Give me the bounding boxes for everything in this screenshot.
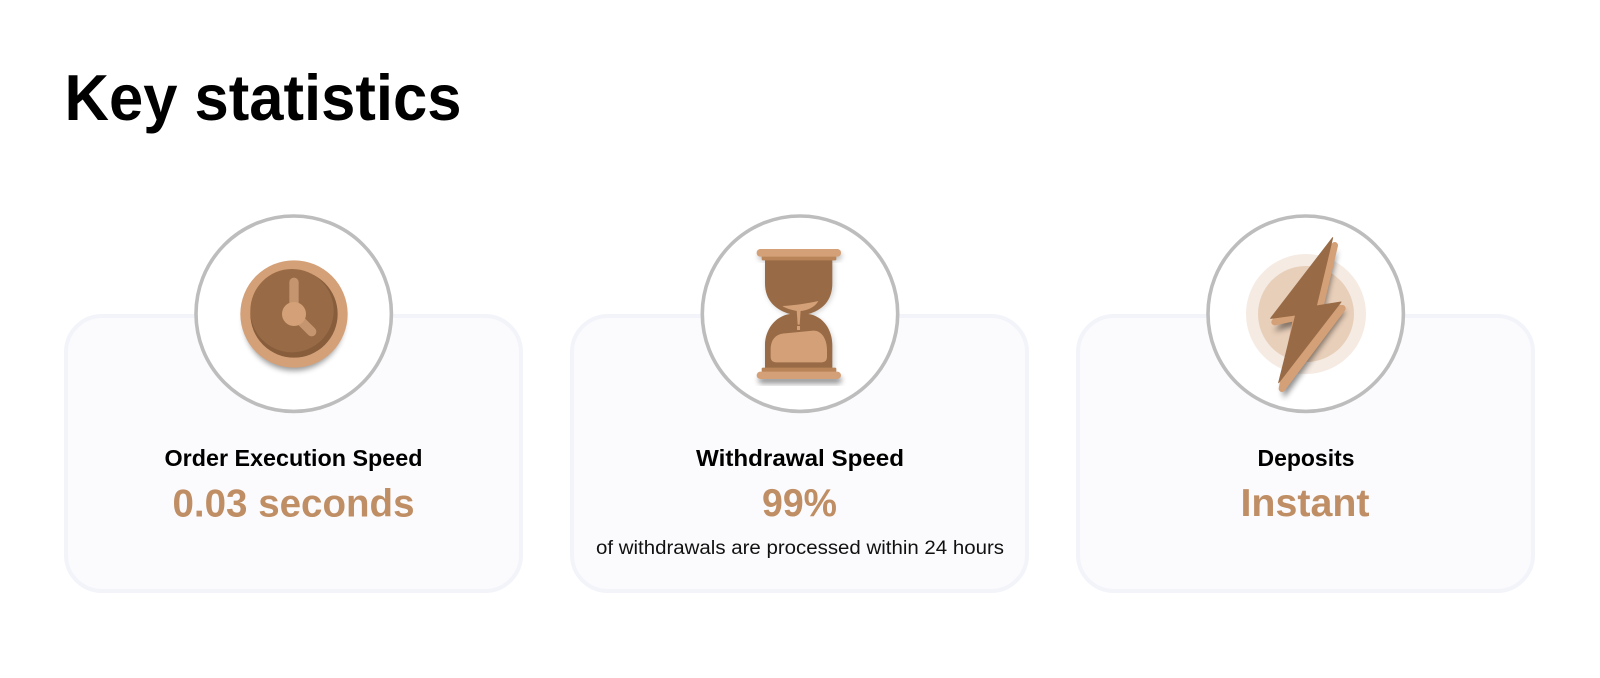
heading: order execution speed: Order Execution Speed <box>164 445 422 471</box>
title: Key statistics <box>64 61 462 134</box>
value: 0.03 seconds: 0.03 seconds <box>172 482 414 526</box>
value: 99%: 99% <box>762 482 837 525</box>
panel: order execution speed <box>66 216 521 591</box>
panel: withdrawal speed <box>572 216 1027 591</box>
icon: hourglass <box>702 216 898 411</box>
panel: deposits <box>1078 216 1533 591</box>
heading: deposits: Deposits <box>1258 445 1354 471</box>
value: instant: Instant <box>1240 482 1370 525</box>
note: withdrawals processed: of withdrawals are processed within 24 hours <box>596 538 1004 559</box>
icon: clock <box>196 216 391 411</box>
heading: withdrawal speed: Withdrawal Speed <box>696 445 904 471</box>
icon: lightning bolt <box>1208 216 1403 411</box>
